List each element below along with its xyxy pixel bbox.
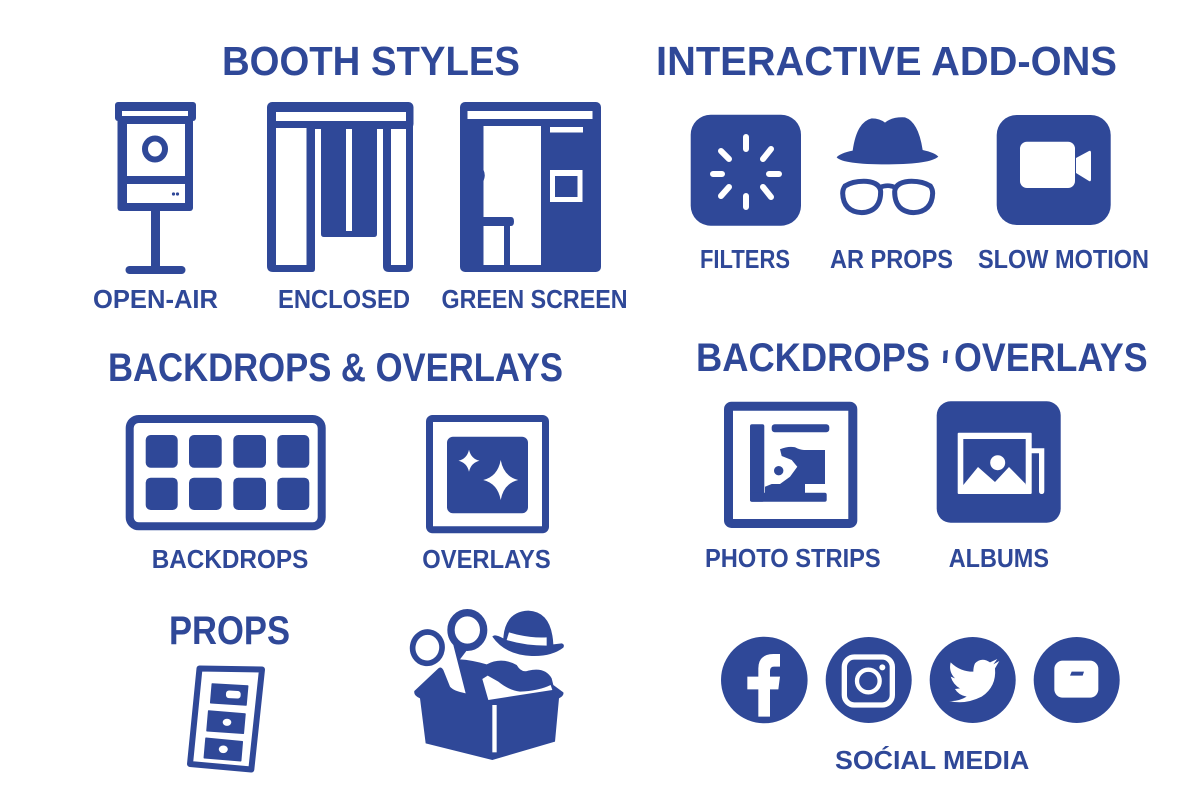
heading: backdrops overlays with stray mark: BACKDROPS <box>696 336 930 380</box>
icon: open-air booth <box>115 102 196 274</box>
icon: ar props hat and glasses <box>837 117 938 213</box>
label: backdrops: BACKDROPS <box>152 544 308 574</box>
icon: twitter <box>930 637 1016 723</box>
icon: backdrops grid <box>130 419 322 526</box>
label: photo strips: PHOTO STRIPS <box>705 543 881 573</box>
label: albums: ALBUMS <box>949 543 1049 573</box>
icon: facebook <box>721 637 808 723</box>
heading: interactive add-ons: INTERACTIVE ADD-ONS <box>656 38 1117 84</box>
icon: filters <box>691 115 801 226</box>
heading: backdrops overlays with stray mark: OVERLAYS <box>954 336 1148 380</box>
label: enclosed: ENCLOSED <box>278 284 410 314</box>
panel: social media <box>721 637 1120 775</box>
heading: booth styles: BOOTH STYLES <box>222 38 520 84</box>
icon: albums <box>937 401 1061 523</box>
label: slow motion: SLOW MOTION <box>978 244 1149 274</box>
label: open-air: OPEN-AIR <box>93 284 218 314</box>
icon: overlays sparkle frame <box>430 418 546 530</box>
icon: props box with scissors, hat and moustache <box>410 611 564 760</box>
icon: slow motion video camera <box>997 115 1111 225</box>
icon: props drawer card <box>190 668 262 770</box>
icon: green screen booth <box>460 102 601 272</box>
heading: backdrops and overlays: BACKDROPS & OVERLAYS <box>108 346 563 390</box>
label: overlays: OVERLAYS <box>422 544 551 574</box>
icon: video platform <box>1034 637 1120 723</box>
label: green screen: GREEN SCREEN <box>442 284 628 314</box>
panel: backdrops and overlays right <box>696 336 1148 573</box>
label: ar props: AR PROPS <box>830 244 953 274</box>
panel: props <box>169 609 564 770</box>
icon: enclosed booth <box>267 102 414 272</box>
panel: booth styles <box>93 38 628 314</box>
icon: photo strips <box>728 406 853 524</box>
label: social media: SOĆIAL MEDIA <box>835 745 1030 775</box>
panel: interactive add-ons <box>656 38 1149 274</box>
icon: instagram <box>826 637 912 723</box>
heading: props: PROPS <box>169 609 290 653</box>
label: filters: FILTERS <box>700 244 790 274</box>
panel: backdrops and overlays left <box>108 346 563 574</box>
heading: backdrops overlays with stray mark <box>696 336 1148 380</box>
